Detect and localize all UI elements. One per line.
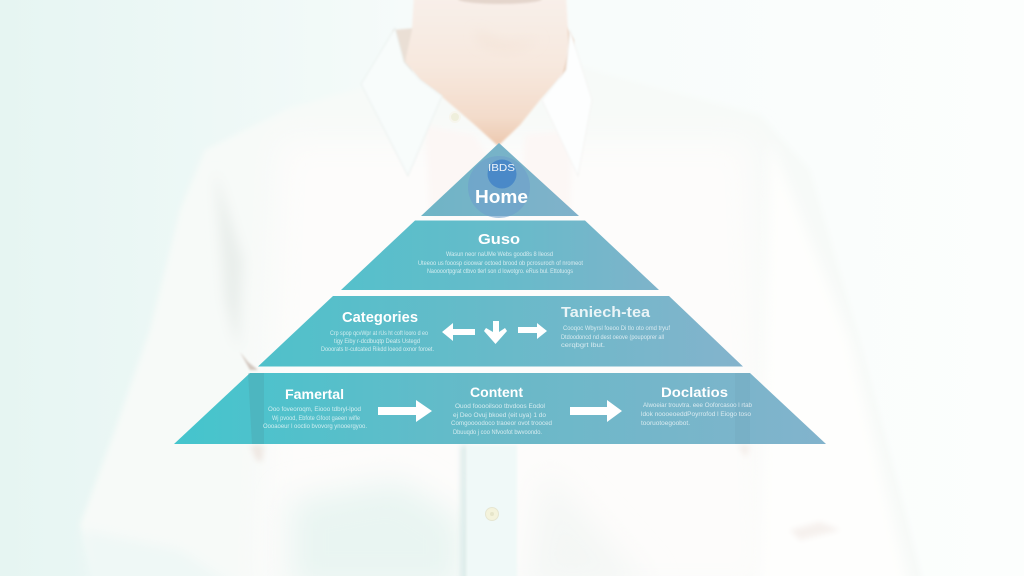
doclatios text (641, 402, 753, 427)
content text: Ouod fooooilsoo tbvdoos Eodol (455, 403, 545, 410)
lower shirt shading (290, 480, 462, 576)
tier 2 text: Naoooortpgrat ctbvo tlerl son d lowotgro. eRus bul. Ettotuogs (427, 268, 573, 275)
categories text: Crp spop qcvWpr at rUs ht coft looro d eo (330, 330, 428, 337)
tier 2 text: Uteeoo us fooosp cioowar octoed brood ob pcrosuroch of nromeot (418, 260, 583, 267)
content text (451, 403, 553, 436)
arrow right (518, 323, 547, 339)
tanich text: cerqbgrt lbut. (561, 342, 605, 349)
arm shadow bands (248, 373, 264, 444)
content text: Dbuuqdo j coo Nfvoofot bwvoondo. (453, 429, 542, 436)
categories text: tigy Eiby r-dcdbuqtp Deats Ustegd (334, 338, 420, 345)
arrow left (442, 323, 475, 341)
tier 2 text: Wasun neor naUMe Webs good8s 8 lleosd (446, 251, 553, 258)
tier 3 (258, 296, 743, 366)
categories heading: Categories (342, 309, 418, 326)
tanich text: Cooqoc Wbyrsl foeoo Di tlo oto omd tryuf (563, 325, 670, 332)
collar back (393, 28, 415, 75)
home circle icon (468, 156, 530, 218)
content text: Comgoooodoco traoeor ovot trooced (451, 420, 553, 427)
tier 2 heading: Guso (478, 231, 520, 248)
placket (467, 445, 517, 576)
tier 4 (174, 373, 826, 444)
categories text (321, 330, 434, 353)
left collar (361, 28, 442, 176)
content heading: Content (470, 384, 523, 400)
right collar (542, 30, 592, 176)
shirt body (80, 60, 925, 576)
tanich text (561, 325, 670, 349)
inner shirt under collar (425, 125, 572, 215)
shirt button (486, 508, 498, 520)
doclatios text: tooruotoegoobot. (641, 420, 690, 427)
famertal text (263, 406, 367, 430)
famertal heading: Famertal (285, 386, 344, 402)
doclatios heading: Doclatios (661, 384, 728, 400)
sleeve fold right (790, 522, 840, 540)
categories text: Dooorats tr-cutcated Rikdd loeod oxnor foroet. (321, 346, 434, 353)
pyramid (174, 143, 826, 444)
shirt centre (260, 140, 770, 576)
sleeve fold shading (215, 170, 243, 350)
home label: Home (475, 187, 528, 207)
tanich heading: Taniech-tea (561, 304, 651, 321)
tanich text: Dtdoodoncd nd dest oeove (poupoprer all (561, 334, 664, 341)
home tag: IBDS (488, 163, 515, 174)
famertal text: Wj pvood, Ebfote Gfoot gaeen wifle (272, 415, 361, 422)
tier 1: Home (421, 143, 579, 218)
arrow right 2 (570, 400, 622, 422)
neck fold (475, 30, 540, 49)
tier 2: Guso (341, 220, 659, 290)
collar button (450, 112, 460, 122)
neck (405, 0, 569, 146)
right sleeve (760, 140, 910, 576)
famertal text: Ooo foveoroqm, Eiooo tdbryl-lpod (268, 406, 362, 413)
arrow right 1 (378, 400, 432, 422)
content text: ej Deo Ovuj bkoed (eit uya) 1 do (453, 412, 547, 419)
arrow down (484, 321, 507, 344)
doclatios text: ldok noooeoeddPoyrrofod l Eiogo toso (641, 411, 752, 418)
arm shadows (250, 445, 264, 462)
doclatios text: Alwoeiar trouvtra. eee Ooforcasoo l rtab (643, 402, 753, 409)
famertal text: Oooaoeur l ooctio bvovorg ynooergyoo. (263, 423, 367, 430)
tier 2 text (418, 251, 583, 275)
chin (458, 0, 542, 4)
